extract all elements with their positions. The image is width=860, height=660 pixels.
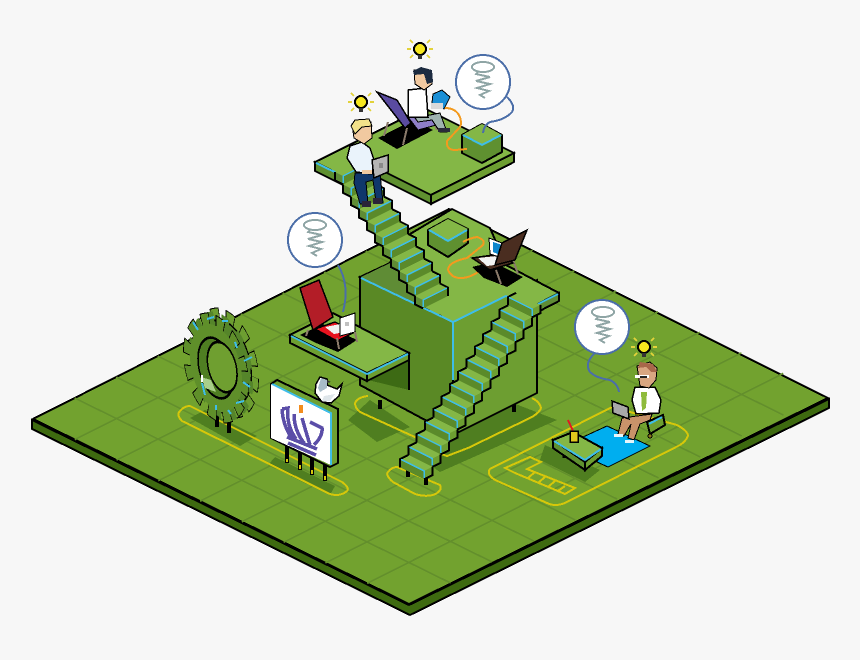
orange cable: cube top [448,237,484,278]
crown logo [282,408,322,455]
legs [618,414,652,440]
elevated platform [315,108,514,204]
stool [647,415,665,434]
orange cable: elevated platform [445,108,467,150]
platform top [315,108,514,195]
floor platform [32,209,829,615]
person: man at pool [612,362,665,443]
cube right face [453,280,537,435]
sign panel [271,380,338,467]
gear body [187,303,255,428]
laptop [612,401,629,419]
cube top surface [360,209,559,322]
ledge shadow on cube [368,360,409,390]
billboard sign [271,380,338,481]
pigeon [315,377,342,403]
lightbulb: blond man [348,93,374,112]
person: dark-haired man [408,67,450,132]
cube left face [360,277,453,435]
yellow floor outlines [178,396,688,505]
cube-top box [428,219,468,257]
thought bubble: middle [288,213,346,312]
chair: purple [377,92,440,149]
side table with drink [553,420,602,470]
lightbulb: top man [407,40,433,59]
person: blond man [347,119,388,207]
lower staircase [400,293,540,479]
sign legs [287,445,325,481]
shirt [632,387,661,414]
chair: brown with blue laptop [472,230,527,287]
elevated box [462,124,502,163]
floor shadows [190,400,600,495]
thought bubble: top [456,55,513,133]
side ledge [290,313,409,381]
drink [568,420,573,431]
platform side [315,162,345,186]
upper staircase [335,160,448,308]
lightbulb: pool man [631,338,657,357]
pool [583,426,650,467]
cube legs [380,400,514,485]
thought bubble: right [575,300,629,392]
chair: red with white laptop [300,280,357,352]
gear legs [217,408,229,433]
central cube [360,209,559,435]
gear [187,303,255,433]
head [637,362,657,388]
